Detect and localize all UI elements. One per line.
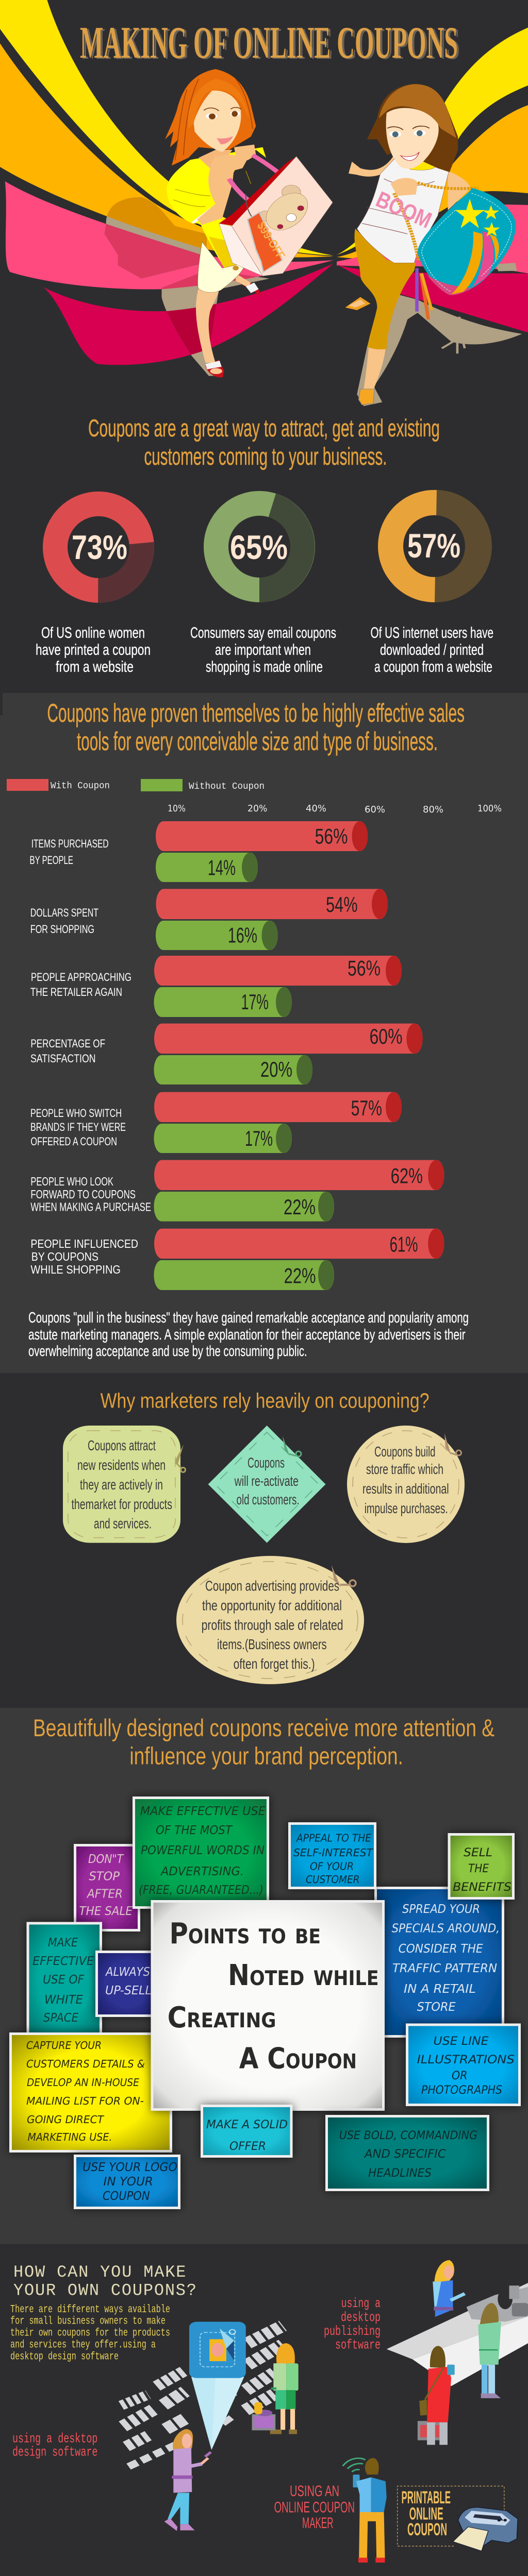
card: capture your customers details: CUSTOMERS DETAILS & [26, 2058, 145, 2070]
card: capture your customers details: GOING DIRECT [27, 2113, 105, 2126]
coupon: additional profits: the opportunity for additional [202, 1597, 342, 1614]
label: desktop design software: design software [12, 2445, 97, 2460]
card: appeal to self-interest: APPEAL TO THE [295, 1832, 371, 1844]
axis labels: 60% [365, 804, 385, 815]
row: people influenced by coupons: 22% [284, 1264, 316, 1288]
card: make effective use of powerful words: ADVERTISING. [160, 1865, 244, 1878]
card: always up-sell: UP-SELL [105, 1984, 152, 1997]
illustration: tiles, phone app and shoppers [121, 2260, 528, 2563]
row: people who switch brands: 17% [245, 1126, 273, 1150]
header illustration: ribbons and two shoppers [0, 0, 528, 406]
card: use line illustrations: OR [452, 2070, 467, 2082]
coupon: build store traffic [347, 1426, 465, 1543]
card: appeal to self-interest [290, 1824, 375, 1888]
printable online coupon box: ONLINE [409, 2504, 443, 2524]
card: make effective use of powerful words [134, 1798, 268, 1907]
printable online coupon box: PRINTABLE [401, 2488, 451, 2507]
coupon: additional profits: Coupon advertising provides [205, 1578, 339, 1594]
coupon: re-activate old customers: old customers. [236, 1492, 300, 1507]
card: points to be noted while creating a coupon: Noted while [228, 1959, 379, 1992]
coupon: re-activate old customers: will re-activate [234, 1473, 299, 1489]
row: items purchased by people [30, 821, 368, 882]
donut stat: 57% [378, 490, 492, 602]
row: people influenced by coupons: PEOPLE INFLUENCED [30, 1237, 138, 1250]
panel: sales tools chart section [0, 693, 528, 1373]
label: online coupon maker: MAKER [302, 2515, 334, 2532]
card: use your logo [75, 2156, 179, 2208]
heading: Why marketers rely heavily on couponing? [101, 1389, 430, 1413]
row: people who look forward to coupons: PEOPLE WHO LOOK [30, 1175, 113, 1188]
card: capture your customers details: CAPTURE YOUR [26, 2039, 102, 2052]
card: use bold commanding headlines: AND SPECIFIC [364, 2148, 446, 2161]
card: spread your specials around [375, 1888, 503, 2036]
row: people who switch brands: BRANDS IF THEY WERE [30, 1121, 126, 1133]
coupon: attract new residents [63, 1426, 186, 1543]
row: people approaching the retailer again: PEOPLE APPROACHING [31, 971, 131, 984]
card: points to be noted while creating a coupon: Points to be [169, 1917, 321, 1951]
coupon: additional profits: profits through sale of related [202, 1617, 343, 1633]
card: make effective use of powerful words: MAKE EFFECTIVE USE [140, 1805, 266, 1818]
card: make effective use of powerful words: OF THE MOST [156, 1824, 233, 1837]
intro text [10, 2304, 170, 2363]
card: points to be noted while creating a coupon: Creating [168, 2001, 276, 2035]
card: make effective use of white space: MAKE [48, 1936, 78, 1950]
row: dollars spent for shopping: DOLLARS SPENT [30, 906, 98, 919]
row: people influenced by coupons: BY COUPONS [31, 1250, 98, 1263]
card: spread your specials around: CONSIDER THE [399, 1942, 483, 1956]
row: people who switch brands: OFFERED A COUPON [30, 1135, 117, 1148]
row: percentage of satisfaction: PERCENTAGE OF [30, 1037, 105, 1050]
card: spread your specials around: IN A RETAIL [404, 1982, 476, 1996]
card: capture your customers details: MAILING LIST FOR ON- [26, 2095, 144, 2107]
card: appeal to self-interest: CUSTOMER [306, 1873, 360, 1886]
row: items purchased by people: 56% [315, 824, 348, 848]
coupon: build store traffic: Coupons build [374, 1444, 435, 1460]
coupon: attract new residents: Coupons attract [88, 1437, 156, 1453]
printable online coupon box: COUPON [407, 2520, 447, 2539]
woman with purple dress [164, 2429, 212, 2531]
panel: how can you make your own coupons [10, 2260, 528, 2576]
axis labels: 20% [248, 803, 267, 814]
card: use line illustrations: PHOTOGRAPHS [421, 2084, 502, 2097]
intro text: and services they offer.using a [10, 2339, 156, 2351]
heading: YOUR OWN COUPONS? [13, 2281, 196, 2300]
woman in red dress [418, 2346, 455, 2445]
card: points to be noted while creating a coupon [152, 1901, 384, 2109]
card: spread your specials around: STORE [417, 2001, 456, 2014]
caption: 57% [370, 624, 493, 675]
row: percentage of satisfaction [30, 1024, 423, 1084]
printable online coupon box [398, 2486, 504, 2546]
label: online coupon maker: ONLINE COUPON [274, 2499, 355, 2516]
axis labels [168, 803, 502, 815]
panel: why marketers rely on couponing [63, 1389, 465, 1684]
row: dollars spent for shopping: 16% [228, 923, 257, 947]
donut stat: 73% [43, 492, 154, 603]
coupon: attract new residents: themarket for products [71, 1496, 172, 1512]
card: sell the benefits [449, 1834, 514, 1898]
caption: 65% [190, 624, 336, 675]
card: make a solid offer: MAKE A SOLID [206, 2119, 288, 2131]
row: people approaching the retailer again: 17% [241, 990, 269, 1014]
caption: 73%: Of US online women [41, 624, 145, 641]
card: appeal to self-interest: SELF-INTEREST [293, 1846, 374, 1859]
coupon: attract new residents: new residents when [77, 1457, 166, 1473]
donut stat: 65% [204, 491, 315, 602]
product tiles [121, 2326, 283, 2467]
coupon: build store traffic: impulse purchases. [365, 1500, 448, 1516]
label: online coupon maker [274, 2483, 355, 2532]
row: people approaching the retailer again: 56% [348, 956, 381, 980]
label: online coupon maker: USING AN [290, 2483, 339, 2500]
legend [7, 779, 265, 792]
row: people approaching the retailer again: THE RETAILER AGAIN [30, 986, 122, 998]
card: spread your specials around: SPECIALS AROUND, [392, 1922, 500, 1936]
woman behind counter [433, 2260, 465, 2317]
card: capture your customers details: MARKETING USE. [28, 2131, 112, 2143]
donut stat: 57%: 57% [407, 527, 460, 565]
card: make a solid offer: OFFER [229, 2140, 266, 2153]
coupon: build store traffic: results in additional [362, 1481, 449, 1497]
coupon: build store traffic: store traffic which [366, 1461, 443, 1477]
card: make effective use of white space: WHITE [44, 1993, 83, 2007]
label: desktop design software: using a desktop [12, 2431, 97, 2447]
paragraph: pull in the business [28, 1310, 469, 1360]
coupon: attract new residents: they are actively in [80, 1477, 163, 1493]
row: people who look forward to coupons: 62% [391, 1164, 423, 1188]
coupon: re-activate old customers: Coupons [248, 1455, 285, 1471]
row: people approaching the retailer again [30, 956, 402, 1017]
card: capture your customers details [10, 2034, 171, 2151]
card: spread your specials around: TRAFFIC PATTERN [392, 1962, 497, 1975]
shop counter and camera [387, 2283, 528, 2386]
intro heading: customers coming to your business. [144, 443, 387, 470]
card: don't stop after the sale: AFTER [86, 1888, 123, 1901]
card: use line illustrations: USE LINE [433, 2035, 489, 2048]
shirt print: BOOM [372, 187, 435, 233]
axis labels: 80% [423, 804, 443, 815]
axis labels: 100% [477, 803, 502, 814]
row: people who look forward to coupons: 22% [284, 1195, 316, 1219]
row: people who switch brands: 57% [351, 1096, 382, 1120]
card: make a solid offer [202, 2106, 291, 2157]
label: desktop publishing software: desktop [341, 2310, 381, 2325]
axis labels: 10% [168, 803, 186, 814]
caption: 57%: downloaded / printed [380, 641, 484, 658]
card: don't stop after the sale: DON"T [88, 1853, 124, 1866]
heading: influence your brand perception. [129, 1742, 403, 1770]
row: people influenced by coupons: WHILE SHOPPING [30, 1263, 121, 1276]
caption: 73% [36, 624, 151, 675]
price tag text: $99-OFF [255, 219, 288, 261]
label: desktop publishing software [324, 2296, 381, 2353]
label: desktop publishing software: software [335, 2337, 381, 2353]
row: dollars spent for shopping [30, 889, 388, 950]
row: people who switch brands [30, 1092, 402, 1153]
woman in green top [478, 2303, 501, 2398]
intro text: desktop design software [10, 2351, 119, 2363]
label: desktop design software [12, 2431, 97, 2460]
row: percentage of satisfaction: 60% [369, 1024, 402, 1048]
row: items purchased by people: BY PEOPLE [30, 854, 73, 867]
row: people who look forward to coupons: FORWARD TO COUPONS [30, 1188, 136, 1201]
caption: 65%: are important when [215, 641, 311, 658]
row: people influenced by coupons: 61% [390, 1232, 418, 1256]
card: don't stop after the sale: THE SALE [79, 1905, 133, 1918]
card: use line illustrations [407, 2025, 520, 2105]
row: people influenced by coupons [30, 1229, 444, 1290]
card: use bold commanding headlines [327, 2116, 488, 2190]
bar chart [30, 821, 444, 1290]
card: use your logo: COUPON [103, 2190, 150, 2203]
left woman's shadow [104, 197, 269, 376]
card: capture your customers details: DEVELOP AN IN-HOUSE [27, 2076, 139, 2089]
app icon and projection cone [189, 2322, 246, 2450]
row: people who switch brands: PEOPLE WHO SWITCH [30, 1107, 122, 1120]
intro heading [88, 414, 440, 470]
coupon: re-activate old customers [208, 1426, 326, 1543]
legend: With Coupon [51, 781, 110, 791]
caption: 73%: have printed a coupon [36, 641, 151, 658]
heading: HOW CAN YOU MAKE [13, 2263, 186, 2282]
caption: 73%: from a website [56, 658, 134, 675]
card: don't stop after the sale [75, 1845, 139, 1930]
card: make effective use of white space [28, 1923, 101, 2034]
card: make effective use of powerful words: POWERFUL WORDS IN [141, 1844, 265, 1857]
card: use line illustrations: ILLUSTRATIONS [417, 2054, 515, 2066]
row: people who look forward to coupons: WHEN MAKING A PURCHASE [30, 1200, 151, 1214]
coupon: additional profits: often forget this.) [234, 1656, 315, 1672]
caption: 65%: Consumers say email coupons [190, 624, 336, 641]
heading [33, 1714, 494, 1770]
card: don't stop after the sale: STOP [89, 1870, 120, 1884]
axis labels: 40% [306, 803, 326, 814]
card: use bold commanding headlines: USE BOLD, COMMANDING [339, 2129, 477, 2142]
intro text: for small business owners to make [10, 2316, 166, 2328]
card: make effective use of white space: USE OF [43, 1973, 85, 1987]
card: spread your specials around: SPREAD YOUR [402, 1903, 480, 1916]
woman with yellow hair [252, 2343, 299, 2434]
card: always up-sell [97, 1952, 159, 2015]
card: sell the benefits: SELL [464, 1846, 492, 1859]
row: items purchased by people: ITEMS PURCHASED [31, 837, 109, 850]
woman with blue purse [345, 84, 516, 405]
woman with shopping bag [165, 69, 333, 378]
card: sell the benefits: BENEFITS [453, 1881, 512, 1894]
donut stat: 65%: 65% [230, 528, 288, 566]
card: appeal to self-interest: OF YOUR [310, 1860, 354, 1872]
section heading [47, 699, 465, 756]
printer [453, 2507, 518, 2551]
card: sell the benefits: THE [468, 1862, 489, 1875]
caption: 65%: shopping is made online [206, 658, 323, 675]
card: use your logo: IN YOUR [103, 2175, 153, 2189]
row: percentage of satisfaction: 20% [260, 1057, 292, 1081]
row: percentage of satisfaction: SATISFACTION [30, 1052, 96, 1065]
card: use your logo: USE YOUR LOGO [82, 2161, 177, 2174]
card: use bold commanding headlines: HEADLINES [368, 2167, 432, 2180]
heading [13, 2263, 196, 2300]
row: items purchased by people: 14% [208, 856, 236, 880]
intro text: There are different ways available [10, 2304, 170, 2316]
row: people who look forward to coupons [30, 1160, 444, 1222]
coupon: additional profits [176, 1556, 364, 1684]
man with phone [343, 2458, 387, 2563]
legend: Without Coupon [189, 782, 265, 792]
card: points to be noted while creating a coupon: A Coupon [239, 2042, 357, 2075]
coupon: additional profits: items.(Business owners [217, 1636, 327, 1652]
row: dollars spent for shopping: 54% [326, 892, 358, 917]
ribbons left and right [0, 0, 528, 406]
card: always up-sell: ALWAYS [105, 1965, 150, 1979]
coupon: attract new residents: and services. [94, 1516, 152, 1531]
paragraph: pull in the business: overwhelming acceptance and use by the consuming public. [28, 1343, 307, 1360]
card: make effective use of white space: EFFECTIVE [32, 1955, 94, 1968]
row: dollars spent for shopping: FOR SHOPPING [30, 923, 94, 936]
label: desktop publishing software: using a [341, 2296, 381, 2311]
label: desktop publishing software: publishing [324, 2324, 381, 2339]
card: make effective use of powerful words: (FREE, GUARANTEED...) [139, 1884, 263, 1897]
donut stat: 73%: 73% [72, 528, 127, 566]
intro text: their own coupons for the products [10, 2328, 170, 2340]
panel: beautifully designed coupons [0, 1708, 528, 2244]
card: make effective use of white space: SPACE [43, 2011, 78, 2025]
